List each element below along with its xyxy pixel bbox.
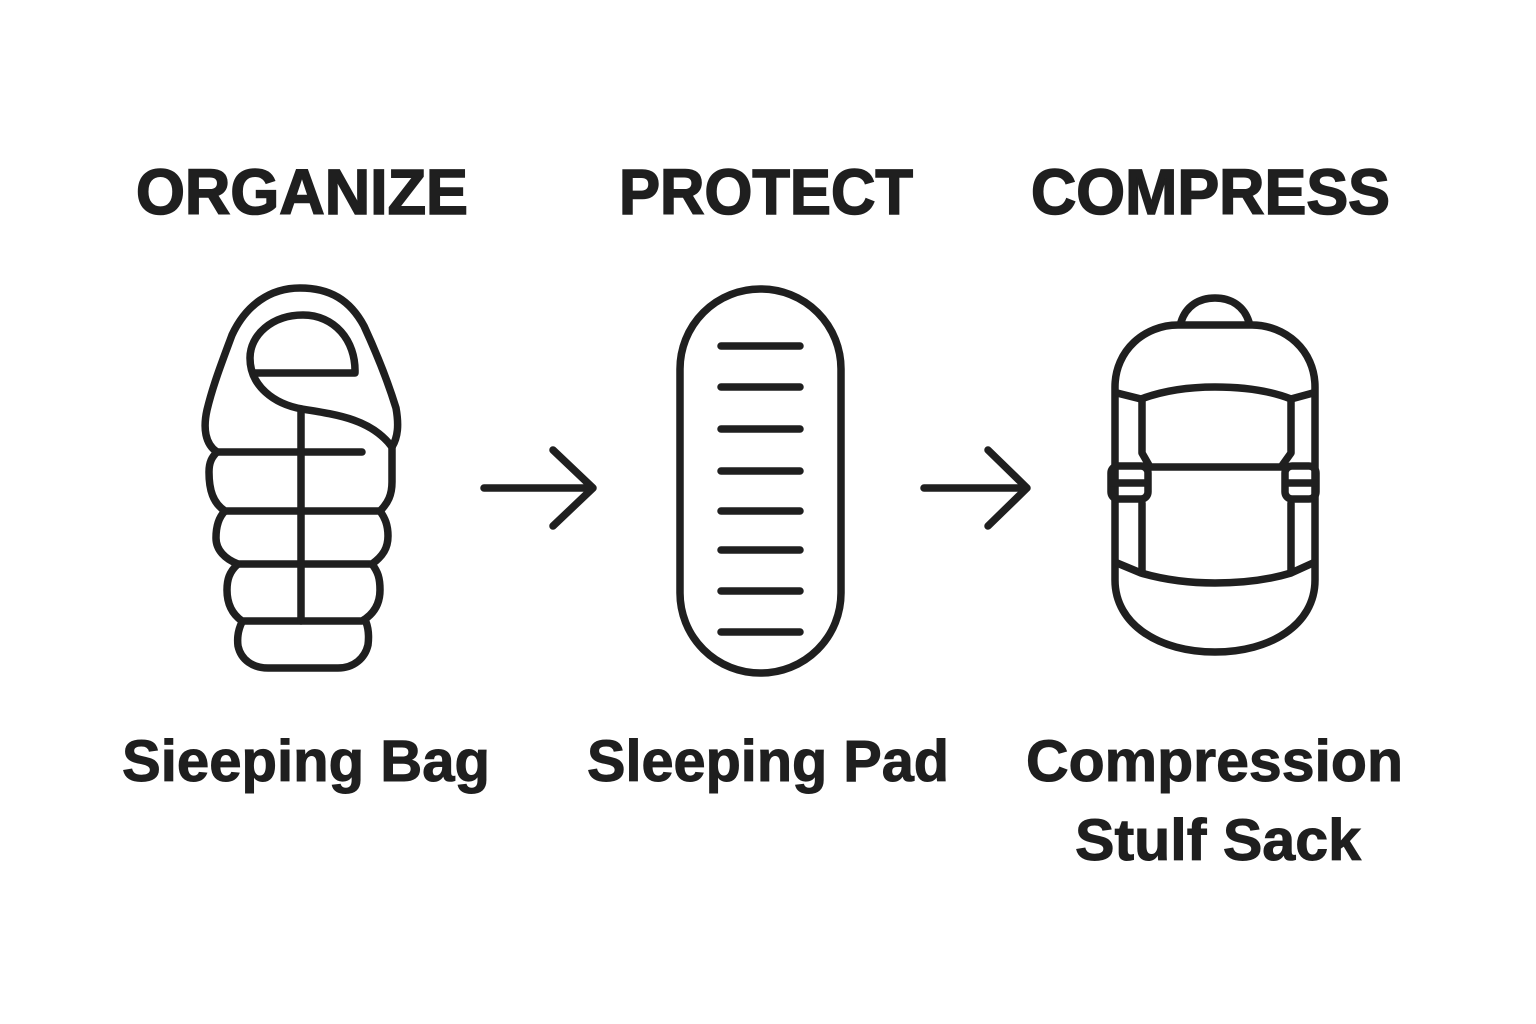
arrow: pad to sack: [924, 450, 1027, 526]
icon: compression stuff sack: [1111, 298, 1316, 652]
arrow: bag to pad: [484, 450, 593, 526]
heading: protect: PROTECT: [619, 156, 913, 228]
heading: organize: ORGANIZE: [136, 156, 468, 228]
label: sleeping pad: Sleeping Pad: [587, 729, 949, 794]
heading: compress: COMPRESS: [1031, 156, 1390, 228]
label: compression: Compression: [1026, 729, 1403, 794]
label: stuff sack: Stulf Sack: [1075, 808, 1362, 873]
icon: sleeping pad: [680, 289, 841, 673]
label: sleeping bag: Sieeping Bag: [122, 729, 490, 794]
icon: sleeping bag: [205, 288, 398, 668]
